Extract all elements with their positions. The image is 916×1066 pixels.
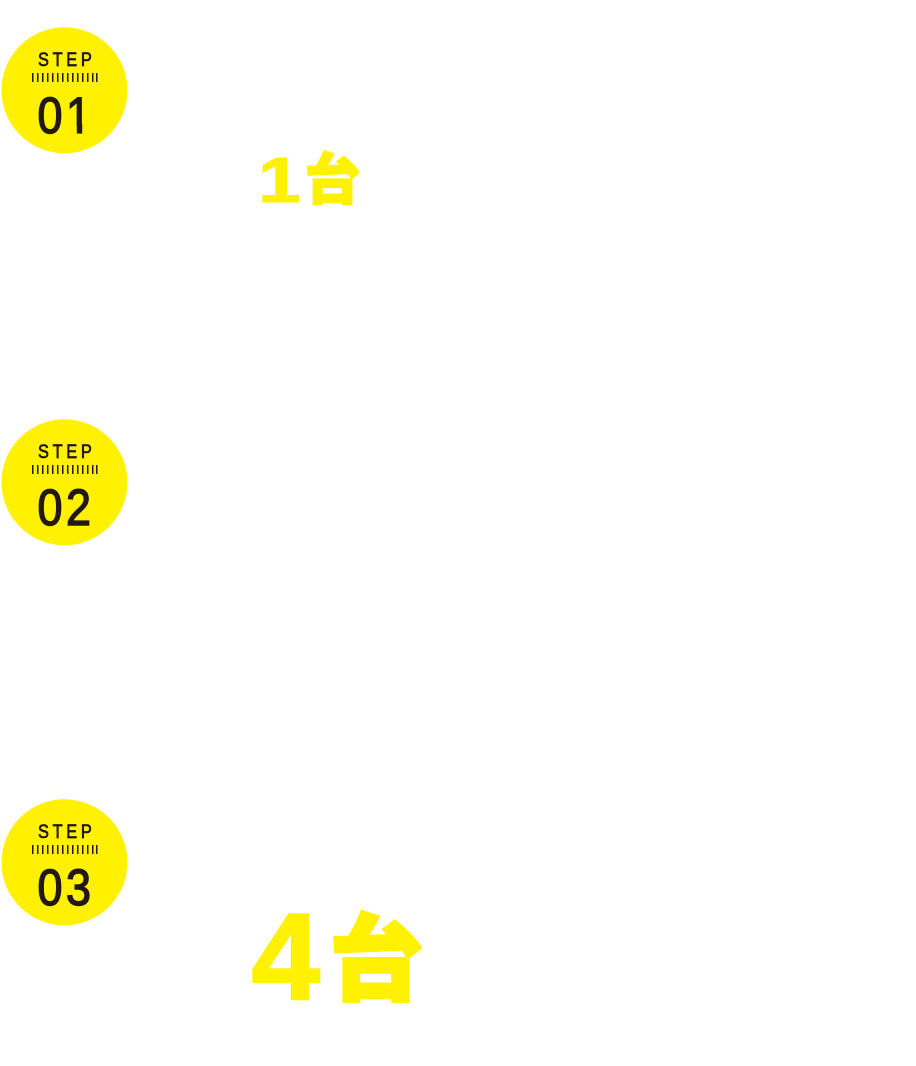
- highlight: 1台: [258, 144, 360, 216]
- highlight: 1台: 台: [305, 149, 360, 211]
- badge: step 01: STEP: [38, 49, 92, 70]
- badge: step 02: STEP: [38, 441, 92, 462]
- highlight: 1台: 1: [258, 144, 301, 216]
- badge: step 01: [2, 27, 128, 153]
- badge: step 03: [2, 799, 128, 925]
- badge: step 03: 3: [66, 860, 91, 917]
- highlight: 4台: [252, 890, 422, 1026]
- badge: step 02: [2, 419, 128, 545]
- badge: step 03: 0: [38, 860, 62, 917]
- highlight: 4台: 台: [330, 910, 422, 1012]
- highlight: 4台: 4: [252, 890, 320, 1026]
- badge: step 02: 2: [66, 480, 91, 537]
- badge: step 03: STEP: [38, 821, 92, 842]
- badge: step 01: 1: [66, 88, 91, 145]
- badge: step 02: 0: [38, 480, 62, 537]
- badge: step 01: 0: [38, 88, 62, 145]
